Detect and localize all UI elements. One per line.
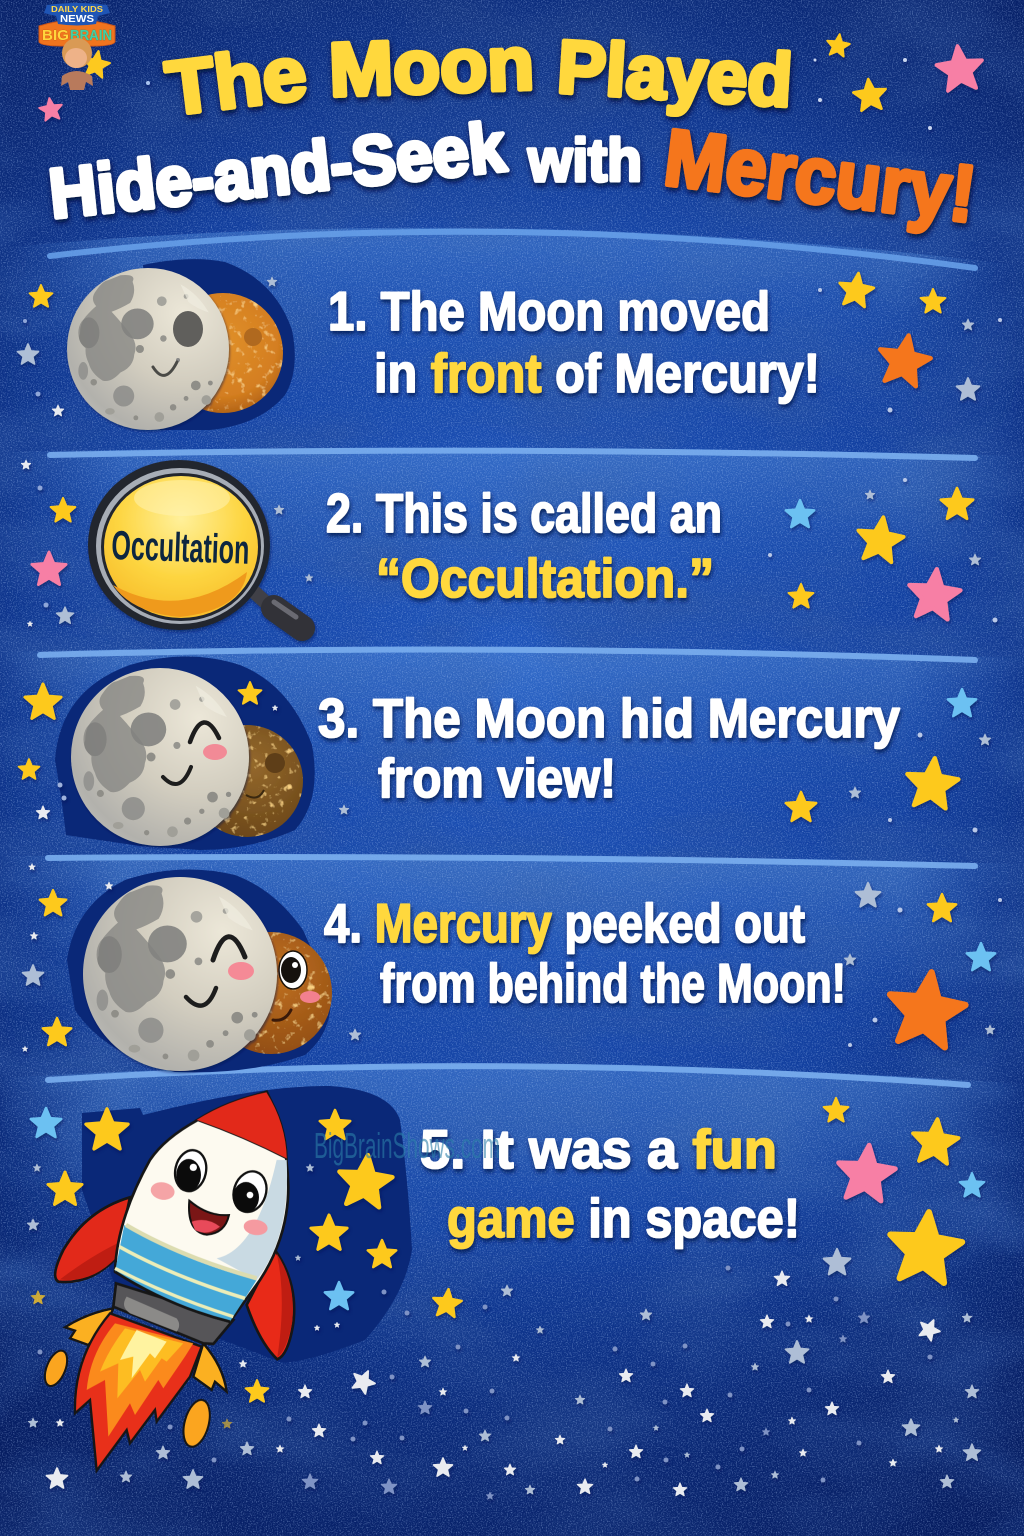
title <box>45 21 980 239</box>
text: step 3 <box>318 687 900 809</box>
stars: panel 2 <box>21 460 998 626</box>
title line 1: The <box>162 30 311 132</box>
rocket face <box>149 1147 272 1237</box>
logo: Daily Kids News Big Brain: DAILY KIDS <box>51 4 103 14</box>
illustration: Mercury peeking behind moon <box>67 870 332 1072</box>
title stars <box>38 33 985 130</box>
star field bottom <box>28 1249 981 1499</box>
label: Occultation: Occultation <box>111 522 250 573</box>
side flames <box>40 1308 227 1450</box>
rocket nose <box>196 1092 287 1159</box>
title line 2: Hide-and-Seek <box>45 107 509 233</box>
illustration: moon in front of Mercury <box>67 259 295 430</box>
panel 5: fun game in space <box>27 1086 984 1471</box>
text: step 3: from view! <box>378 747 616 809</box>
title line 2: with <box>527 127 642 194</box>
nozzle <box>113 1283 233 1344</box>
text: step 3: 3. The Moon hid Mercury <box>318 687 900 749</box>
logo: Daily Kids News Big Brain: BRAIN <box>70 27 112 44</box>
rocket right fin <box>247 1250 294 1359</box>
stars: panel 3 <box>19 682 991 832</box>
text: step 5: 5. It was a fun <box>420 1118 777 1180</box>
text: step 4 <box>324 892 846 1014</box>
stars: panel 4 <box>22 864 1002 1051</box>
text: step 2 <box>326 482 722 609</box>
panel 1: moon moved in front <box>18 259 1002 430</box>
stars: panel 1 <box>18 271 1002 416</box>
text: step 2: 2. This is called an <box>326 482 722 544</box>
title line 1: Played <box>555 24 795 122</box>
title line 2: Mercury! <box>660 113 980 239</box>
logo: Daily Kids News Big Brain: BIG <box>42 27 69 44</box>
logo: Daily Kids News Big Brain: NEWS <box>60 14 94 25</box>
dark blob behind rocket <box>82 1086 412 1362</box>
rocket left fin <box>55 1197 130 1282</box>
panel 3: moon hid Mercury <box>19 656 991 850</box>
title line 1 <box>162 21 795 132</box>
title line 1: Moon <box>328 21 535 113</box>
rocket stripes <box>115 1225 257 1322</box>
watermark: BigBrainShows.com <box>314 1125 500 1166</box>
panel 2: occultation <box>21 460 998 630</box>
text: step 5 <box>420 1118 800 1249</box>
icon: magnifying glass <box>88 460 302 630</box>
text: step 1 <box>328 280 820 404</box>
flame <box>75 1313 202 1471</box>
text: step 5: game in space! <box>447 1187 800 1249</box>
rocket <box>40 1092 294 1471</box>
text: step 1: in front of Mercury! <box>374 342 820 404</box>
title line 2 <box>45 107 980 239</box>
illustration: winking moon hiding Mercury <box>55 656 315 850</box>
panel 4: Mercury peeked out <box>22 864 1002 1072</box>
text: step 1: 1. The Moon moved <box>328 280 770 342</box>
text: step 2: “Occultation.” <box>376 547 714 609</box>
rocket body <box>115 1092 288 1322</box>
stars: panel 5 <box>27 1098 984 1402</box>
logo: Daily Kids News Big Brain <box>39 3 115 90</box>
text: step 4: 4. Mercury peeked out <box>324 892 805 954</box>
text: step 4: from behind the Moon! <box>380 952 846 1014</box>
